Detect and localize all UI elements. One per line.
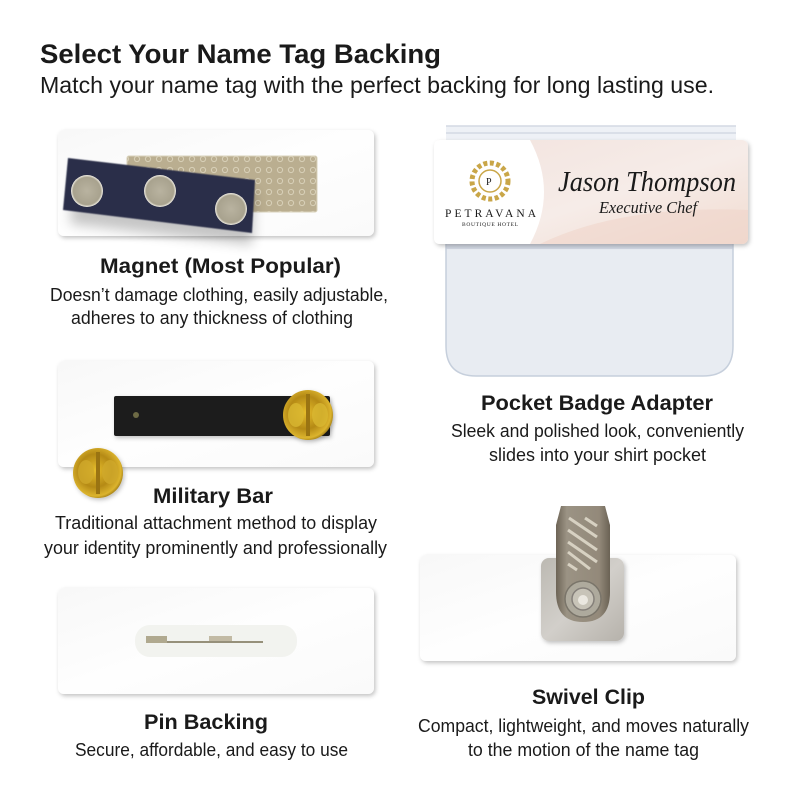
logo text: PETRAVANA	[445, 208, 537, 220]
description: military bar: your identity prominently and professionally	[44, 538, 387, 558]
icon: pin backing	[135, 625, 297, 657]
description: magnet: adheres to any thickness of clothing	[71, 308, 353, 328]
description: swivel clip: to the motion of the name tag	[468, 740, 699, 760]
heading: pin backing: Pin Backing	[144, 711, 268, 734]
title: Select Your Name Tag Backing	[40, 39, 441, 69]
heading: military bar: Military Bar	[153, 485, 273, 508]
panel: military bar	[44, 361, 387, 558]
icon: magnet backing	[63, 156, 317, 245]
panel: swivel clip	[418, 506, 749, 760]
panel: pocket badge adapter	[434, 126, 748, 465]
description: pocket badge adapter	[451, 421, 744, 465]
logo text: BOUTIQUE HOTEL	[462, 222, 519, 228]
subtitle: Match your name tag with the perfect backing for long lasting use.	[40, 72, 714, 98]
icon: clear plastic pocket	[446, 126, 736, 376]
name tag blank: pin backing	[58, 588, 374, 694]
name tag blank: swivel clip	[420, 555, 736, 661]
heading: magnet: Magnet (Most Popular)	[100, 255, 341, 278]
description: military bar	[44, 513, 387, 558]
logo text	[445, 177, 537, 228]
heading: swivel clip: Swivel Clip	[532, 686, 645, 709]
name tag blank: magnet	[58, 130, 374, 236]
description: magnet	[50, 285, 388, 328]
icon: swivel clip	[541, 506, 624, 641]
panel: pin backing	[58, 588, 374, 760]
description: military bar: Traditional attachment method to display	[55, 513, 377, 533]
description: pocket badge adapter: slides into your shirt pocket	[489, 445, 706, 465]
name text: Jason Thompson	[558, 167, 736, 198]
name tag blank: military bar	[58, 361, 374, 467]
description: swivel clip: Compact, lightweight, and moves naturally	[418, 716, 749, 736]
panel: magnet	[50, 130, 388, 328]
description: pin backing: Secure, affordable, and easy to use	[75, 740, 348, 760]
job title: Executive Chef	[598, 198, 699, 217]
description: pocket badge adapter: Sleek and polished look, conveniently	[451, 421, 744, 441]
logo text: P	[486, 177, 492, 188]
name tag: Jason Thompson	[434, 140, 748, 244]
description: swivel clip	[418, 716, 749, 760]
icon: military bar backing	[73, 390, 333, 498]
description: magnet: Doesn’t damage clothing, easily adjustable,	[50, 285, 388, 305]
icon: hotel logo	[472, 163, 508, 199]
heading: pocket badge adapter: Pocket Badge Adapter	[481, 392, 713, 415]
